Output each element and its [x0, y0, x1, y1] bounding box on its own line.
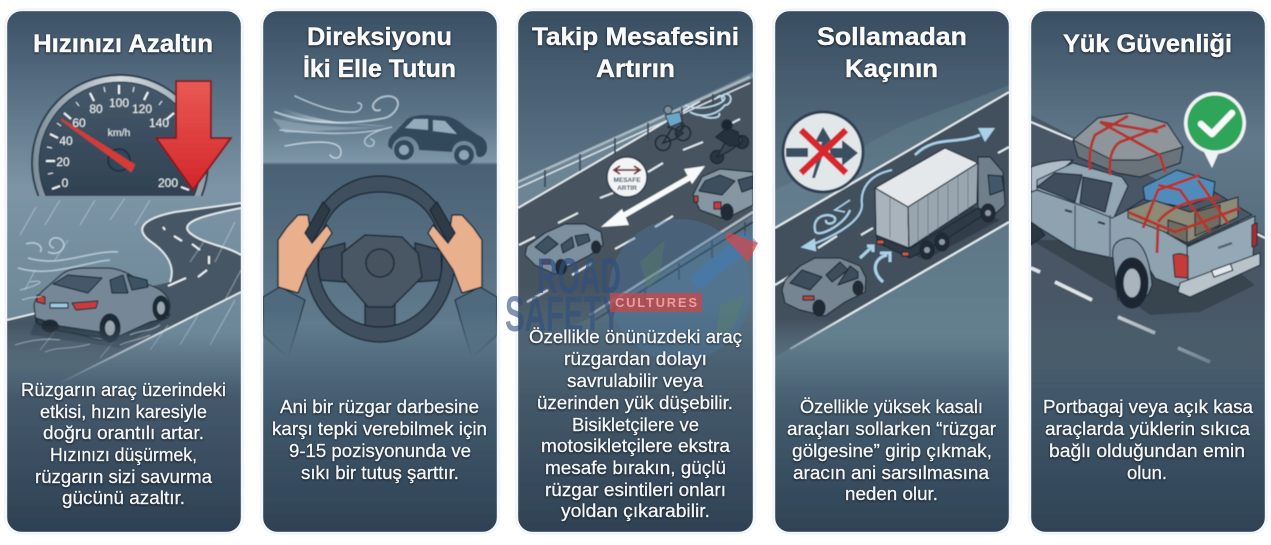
dial labels: 60 — [72, 116, 86, 130]
body text — [787, 397, 996, 504]
body text: Bisikletçilere ve — [572, 415, 699, 435]
panel: Hızınızı Azaltın — [4, 8, 244, 535]
lane dashes — [818, 147, 1009, 248]
left car — [525, 224, 603, 274]
background bands — [864, 86, 1009, 153]
title: Hızınızı Azaltın — [33, 30, 213, 58]
body text: gölgesine” girip çıkmak, — [792, 441, 992, 461]
body text: Özellikle önünüzdeki araç — [529, 327, 742, 347]
body text: Portbagaj veya açık kasa — [1043, 397, 1254, 417]
arm sleeves — [263, 287, 497, 358]
wind flow arrows — [803, 128, 995, 282]
dial labels: 0 — [62, 176, 69, 190]
dial labels: 40 — [59, 134, 73, 148]
dial labels: 100 — [109, 96, 129, 110]
winding road — [7, 203, 241, 385]
dial labels: 20 — [56, 155, 70, 169]
body text: yoldan çıkarabilir. — [561, 501, 710, 521]
pickup truck — [1031, 160, 1260, 308]
body text: rüzgardan dolayı — [564, 349, 707, 369]
badge: mesafe artır — [607, 157, 647, 197]
highway scene — [518, 72, 753, 352]
right hand — [428, 202, 482, 293]
dial labels: 120 — [132, 102, 152, 116]
title: Takip Mesafesini — [532, 23, 739, 51]
body text: Rüzgarın araç üzerindeki — [21, 380, 226, 400]
body text: Özellikle yüksek kasalı — [800, 397, 983, 417]
title: Artırın — [596, 55, 675, 83]
body text: mesafe bırakın, güçlü — [545, 458, 726, 478]
body text: sıkı bir tutuş şarttır. — [301, 463, 459, 483]
panel: Yük Güvenliği — [1028, 8, 1268, 535]
rain — [20, 198, 241, 358]
title — [817, 23, 967, 83]
car silhouette — [388, 115, 487, 165]
body text: olun. — [1127, 463, 1167, 483]
car in rain — [30, 268, 172, 348]
right car — [693, 169, 753, 220]
road — [518, 78, 753, 352]
panel: Direksiyonu İki Elle Tutun — [260, 8, 500, 535]
title — [532, 23, 739, 83]
shoulder strip — [518, 72, 753, 208]
left hand — [278, 202, 332, 293]
body text: Hızınızı düşürmek, — [50, 445, 197, 465]
body text: üzerinden yük düşebilir. — [537, 393, 733, 413]
small car — [782, 258, 866, 316]
panel: Sollamadan Kaçının — [772, 8, 1012, 535]
dial labels: 200 — [158, 176, 178, 190]
body text — [529, 327, 742, 521]
body text — [21, 380, 226, 508]
red down arrow — [156, 81, 231, 190]
body text: neden olur. — [845, 484, 938, 504]
body text: Ani bir rüzgar darbesine — [280, 397, 479, 417]
dial labels: 140 — [149, 116, 169, 130]
badge: mesafe artır: MESAFE — [613, 177, 641, 184]
road — [1031, 115, 1265, 385]
title: Sollamadan — [817, 23, 967, 51]
body text: savrulabilir veya — [567, 371, 704, 391]
no-overtaking icon — [783, 112, 863, 192]
road scene in the rain — [7, 198, 241, 385]
body text: aracın ani sarsılmasına — [793, 463, 990, 483]
body text: 9-15 pozisyonunda ve — [289, 441, 471, 461]
road — [775, 90, 1009, 357]
title: Kaçının — [845, 55, 938, 83]
title: Yük Güvenliği — [1063, 30, 1232, 58]
distance arrow — [601, 166, 705, 227]
roof box — [1073, 113, 1183, 177]
red tie-down straps — [1090, 116, 1240, 253]
watermark logo — [505, 219, 758, 361]
cyclist — [656, 106, 690, 150]
body text: rüzgar esintileri onları — [545, 480, 726, 500]
body text: bağlı olduğundan emin — [1049, 441, 1245, 461]
title: İki Elle Tutun — [303, 55, 456, 83]
body text: rüzgarın sizi savurma — [35, 467, 213, 487]
body text: doğru orantılı artar. — [43, 423, 204, 443]
body text: motosikletçilere ekstra — [541, 436, 731, 456]
body text — [1043, 397, 1254, 483]
truck shadow — [1031, 240, 1255, 315]
wind swirl — [685, 94, 731, 118]
cargo boxes — [1128, 170, 1238, 243]
watermark logo: CULTURES — [615, 295, 697, 310]
body text: araçları sollarken “rüzgar — [787, 419, 996, 439]
badge: mesafe artır: ARTIR — [617, 185, 637, 192]
truck — [875, 148, 1005, 260]
wind swooshes — [272, 96, 398, 158]
motorcycle — [710, 120, 748, 164]
dial labels: km/h — [108, 127, 131, 139]
watermark logo: SAFETY — [505, 286, 621, 342]
body text: araçlarda yüklerin sıkıca — [1045, 419, 1251, 439]
body text: etkisi, hızın karesiyle — [40, 402, 207, 422]
wind swirl — [18, 238, 118, 271]
lane dashes — [519, 119, 740, 302]
dial labels: 80 — [89, 102, 103, 116]
dial labels — [56, 96, 178, 190]
upper guard rail — [518, 77, 750, 188]
speedometer — [30, 74, 209, 196]
steering wheel — [305, 176, 455, 342]
body text — [272, 397, 487, 483]
panel: Takip Mesafesini Artırın — [505, 8, 758, 535]
lower guard rail — [590, 212, 753, 320]
watermark logo: ROAD — [537, 248, 621, 304]
green check badge — [1184, 92, 1246, 168]
water spray — [15, 281, 160, 352]
body text: gücünü azaltır. — [62, 488, 185, 508]
title: Direksiyonu — [307, 23, 452, 51]
title — [303, 23, 456, 83]
body text: karşı tepki verebilmek için — [272, 419, 487, 439]
